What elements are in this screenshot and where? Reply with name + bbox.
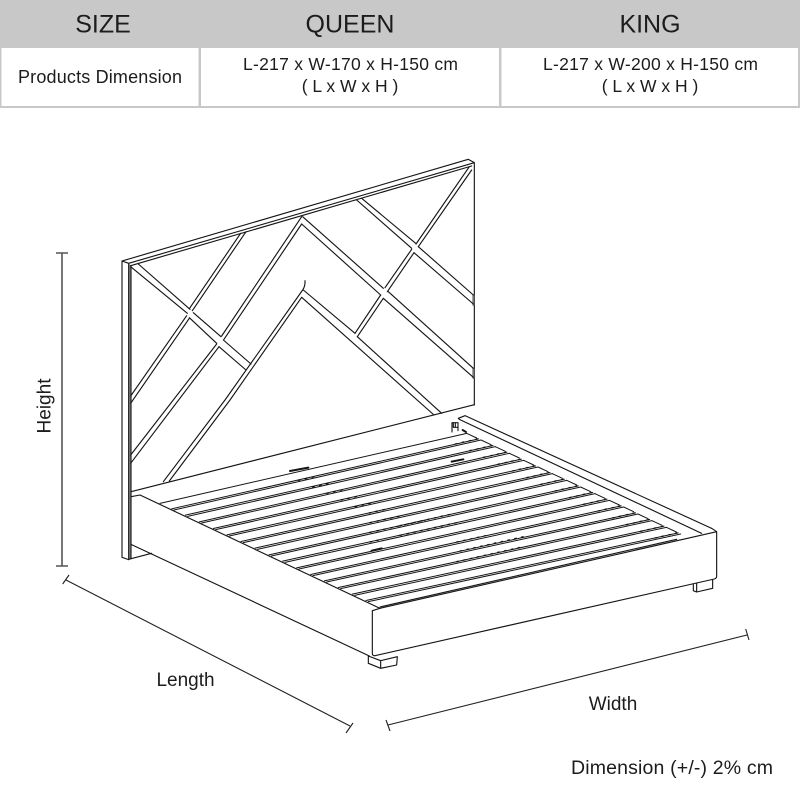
left front foot bbox=[368, 656, 397, 668]
queen dimensions cell: ( L x W x H ) bbox=[302, 76, 398, 96]
king dimensions cell: ( L x W x H ) bbox=[602, 76, 698, 96]
headboard frame bbox=[122, 159, 474, 560]
king dimensions cell bbox=[502, 48, 798, 106]
size table bbox=[0, 0, 800, 108]
queen dimensions cell bbox=[201, 48, 499, 106]
length dimension line bbox=[63, 575, 353, 733]
right front foot bbox=[693, 580, 713, 592]
bed slats bbox=[160, 433, 681, 602]
corner bracket bbox=[452, 423, 466, 432]
width dimension line bbox=[386, 629, 749, 731]
length label: Length bbox=[156, 670, 215, 691]
headboard lattice bars bbox=[131, 167, 473, 482]
width label: Width bbox=[589, 694, 637, 715]
table header band: QUEEN bbox=[306, 10, 394, 38]
bed base foot end bbox=[372, 528, 717, 656]
mattress platform back edge bbox=[131, 405, 474, 492]
headboard lower joint bbox=[131, 553, 152, 559]
height label: Height bbox=[34, 378, 56, 433]
slat fixing marks bbox=[290, 439, 678, 562]
table header band: KING bbox=[619, 10, 681, 38]
bed base side rail bbox=[458, 416, 712, 533]
height dimension line bbox=[56, 253, 68, 566]
king dimensions cell: L-217 x W-200 x H-150 cm bbox=[543, 54, 758, 74]
row label cell bbox=[2, 48, 198, 106]
table header band bbox=[0, 0, 800, 108]
table header band: SIZE bbox=[75, 10, 131, 38]
bed line drawing bbox=[122, 159, 717, 668]
queen dimensions cell: L-217 x W-170 x H-150 cm bbox=[243, 54, 458, 74]
row label cell: Products Dimension bbox=[18, 67, 182, 87]
bed base long side bbox=[131, 495, 380, 656]
tolerance note: Dimension (+/-) 2% cm bbox=[571, 757, 773, 779]
